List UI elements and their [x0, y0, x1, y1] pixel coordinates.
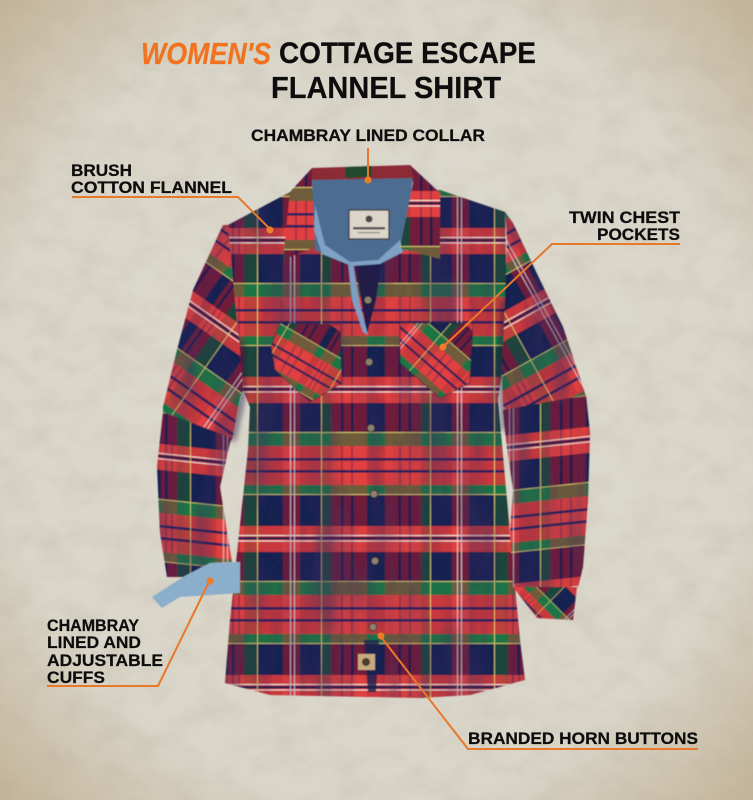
label: twin chest pockets: TWIN CHEST — [569, 208, 681, 227]
label: chambray lined and adjustable cuffs: LINED AND — [47, 633, 141, 652]
chambray placket strip — [348, 263, 368, 335]
label: brush cotton flannel — [71, 161, 274, 234]
chambray front edge — [314, 205, 403, 266]
label: brush cotton flannel: BRUSH — [71, 161, 132, 180]
right forearm sleeve — [503, 395, 590, 588]
fabric fold shading — [150, 185, 595, 700]
title: COTTAGE ESCAPE — [279, 37, 536, 70]
left chest pocket — [271, 323, 342, 402]
title: WOMEN'S — [141, 36, 271, 71]
hem tag — [358, 640, 379, 692]
label: twin chest pockets: POCKETS — [597, 225, 680, 244]
armhole shadows — [232, 300, 506, 440]
left upper sleeve — [163, 225, 243, 440]
body left front — [225, 190, 376, 697]
label: chambray lined and adjustable cuffs — [47, 578, 214, 687]
right upper sleeve — [502, 212, 586, 430]
label: chambray lined collar: CHAMBRAY LINED COLLAR — [251, 126, 485, 145]
collar right flap — [400, 165, 440, 259]
right cuff plaid — [513, 587, 577, 620]
label: chambray lined and adjustable cuffs: CUFFS — [47, 668, 105, 687]
chambray left cuff — [152, 562, 240, 608]
label: branded horn buttons — [378, 632, 698, 749]
left forearm sleeve — [157, 412, 232, 577]
label: chambray lined collar — [251, 126, 485, 184]
chambray collar lining — [312, 176, 413, 264]
label: chambray lined and adjustable cuffs: CHAMBRAY — [47, 616, 140, 635]
collar label — [349, 210, 389, 239]
title: FLANNEL SHIRT — [271, 70, 501, 105]
right chest pocket — [400, 323, 473, 398]
title — [141, 36, 536, 105]
shirt illustration — [150, 165, 595, 700]
label: chambray lined and adjustable cuffs: ADJUSTABLE — [47, 651, 163, 670]
neck opening — [354, 256, 382, 334]
front buttons — [364, 296, 379, 631]
label: branded horn buttons: BRANDED HORN BUTTONS — [468, 729, 698, 748]
collar stand — [312, 165, 414, 180]
collar left flap — [283, 168, 315, 260]
label: twin chest pockets — [440, 208, 681, 350]
label: brush cotton flannel: COTTON FLANNEL — [71, 178, 232, 197]
body right front — [376, 190, 525, 698]
